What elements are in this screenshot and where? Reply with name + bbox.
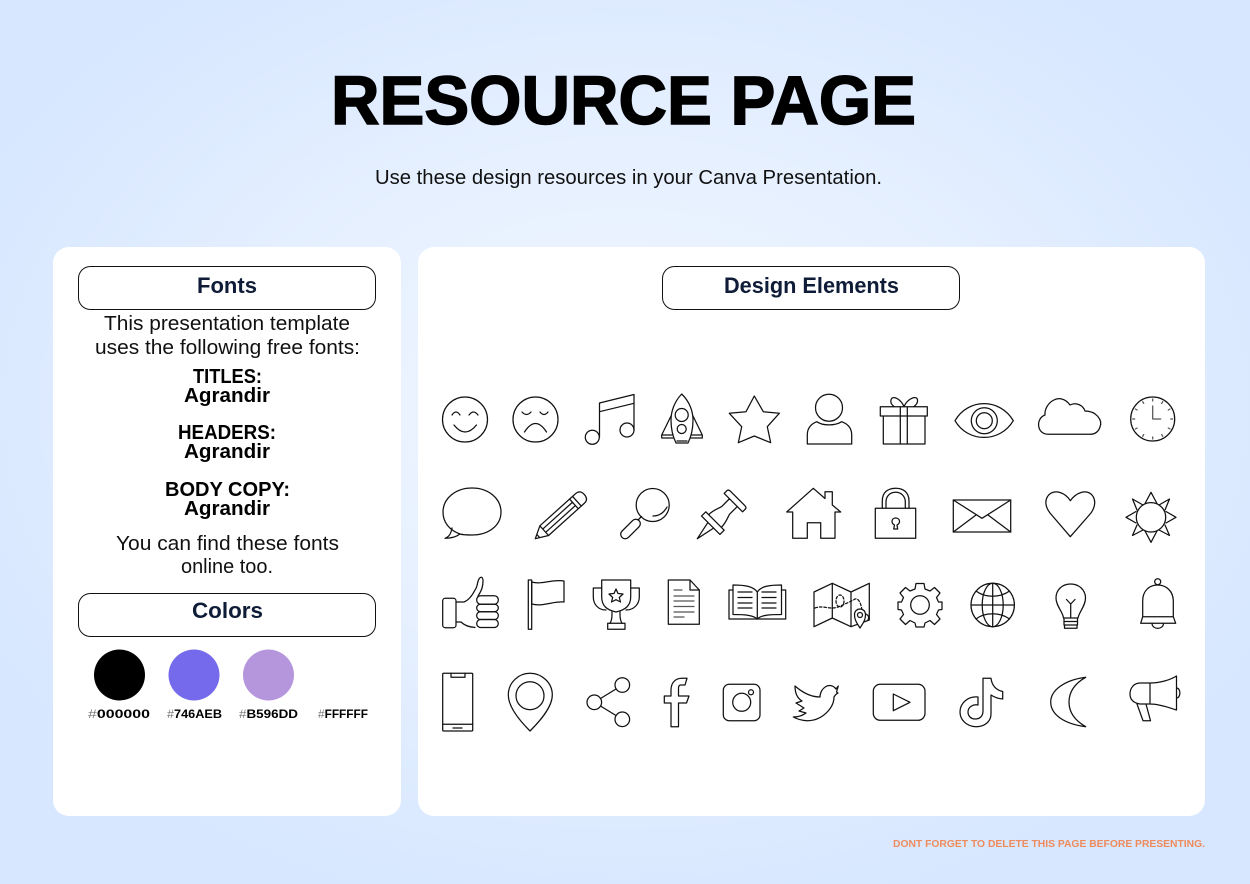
title: RESOURCE PAGE xyxy=(331,62,916,139)
text: body copy font: BODY COPY: xyxy=(165,479,290,501)
swatch: black: #000000 xyxy=(88,709,150,721)
icon: tiktok xyxy=(960,678,1003,727)
icon: flag xyxy=(528,580,564,629)
icon: location pin xyxy=(508,673,552,731)
swatch: purple: #746AEB xyxy=(167,709,222,721)
icon: megaphone xyxy=(1130,676,1180,721)
icon: facebook xyxy=(664,678,689,727)
icon: heart xyxy=(1046,492,1095,537)
icon: cloud xyxy=(1039,399,1101,434)
icon: house xyxy=(787,488,841,538)
text: fonts intro: This presentation template xyxy=(104,313,350,335)
swatch: white: #FFFFFF xyxy=(318,709,368,721)
icon: bell xyxy=(1141,579,1176,628)
heading: colors xyxy=(78,594,376,636)
icon: push pin xyxy=(688,489,747,548)
icon: sad face xyxy=(513,397,558,442)
icon: twitter xyxy=(793,685,838,721)
heading: colors: Colors xyxy=(192,598,263,623)
icon: magnifier xyxy=(619,488,669,541)
swatch: black xyxy=(88,650,150,721)
text: titles font: TITLES: xyxy=(193,366,262,388)
icon: thumbs up xyxy=(443,577,498,628)
icon: moon xyxy=(1051,677,1086,727)
icon: envelope xyxy=(953,500,1011,532)
swatch: lavender: #B596DD xyxy=(239,709,298,721)
heading: fonts: Fonts xyxy=(197,273,257,298)
text: body copy font: Agrandir xyxy=(184,498,270,520)
text: fonts note: online too. xyxy=(181,556,273,578)
icon: map xyxy=(814,583,869,628)
icon: trophy xyxy=(593,580,639,629)
text: titles font: Agrandir xyxy=(184,385,270,407)
icon: globe xyxy=(971,583,1014,627)
heading: design elements xyxy=(662,266,960,310)
footer note: DONT FORGET TO DELETE THIS PAGE BEFORE PRESENTING. xyxy=(893,838,1205,850)
icon: sun xyxy=(1126,492,1176,542)
icon: phone xyxy=(443,673,473,731)
icon: youtube xyxy=(873,684,925,720)
heading: fonts xyxy=(78,266,376,310)
text: headers font: Agrandir xyxy=(184,441,270,463)
subtitle: Use these design resources in your Canva Presentation. xyxy=(375,167,882,189)
text: fonts note: You can find these fonts xyxy=(116,533,339,555)
icon: clock xyxy=(1131,397,1175,441)
icon: gift xyxy=(880,398,927,444)
text: fonts intro: uses the following free fonts: xyxy=(95,337,360,359)
icon: gear xyxy=(898,584,942,627)
swatch: white xyxy=(318,650,368,721)
icon: light bulb xyxy=(1056,584,1086,628)
icon: star xyxy=(729,396,779,443)
icon: instagram xyxy=(723,684,760,721)
swatch: purple xyxy=(167,650,222,721)
icon: document xyxy=(668,580,699,624)
swatch: lavender xyxy=(239,650,298,721)
panel: design elements xyxy=(418,247,1205,816)
icon: rocket xyxy=(662,394,702,443)
icon: padlock xyxy=(875,488,916,538)
text: headers font: HEADERS: xyxy=(178,422,276,444)
icon: music note xyxy=(585,394,634,444)
icon: open book xyxy=(729,585,786,619)
icon: share xyxy=(587,678,630,727)
icon: smile xyxy=(442,397,488,442)
icon: person xyxy=(807,394,852,444)
icon: pencil xyxy=(531,490,589,544)
heading: design elements: Design Elements xyxy=(724,273,899,298)
panel: fonts and colors xyxy=(53,247,401,816)
icon: eye xyxy=(955,404,1013,437)
icon: speech bubble xyxy=(443,488,501,538)
